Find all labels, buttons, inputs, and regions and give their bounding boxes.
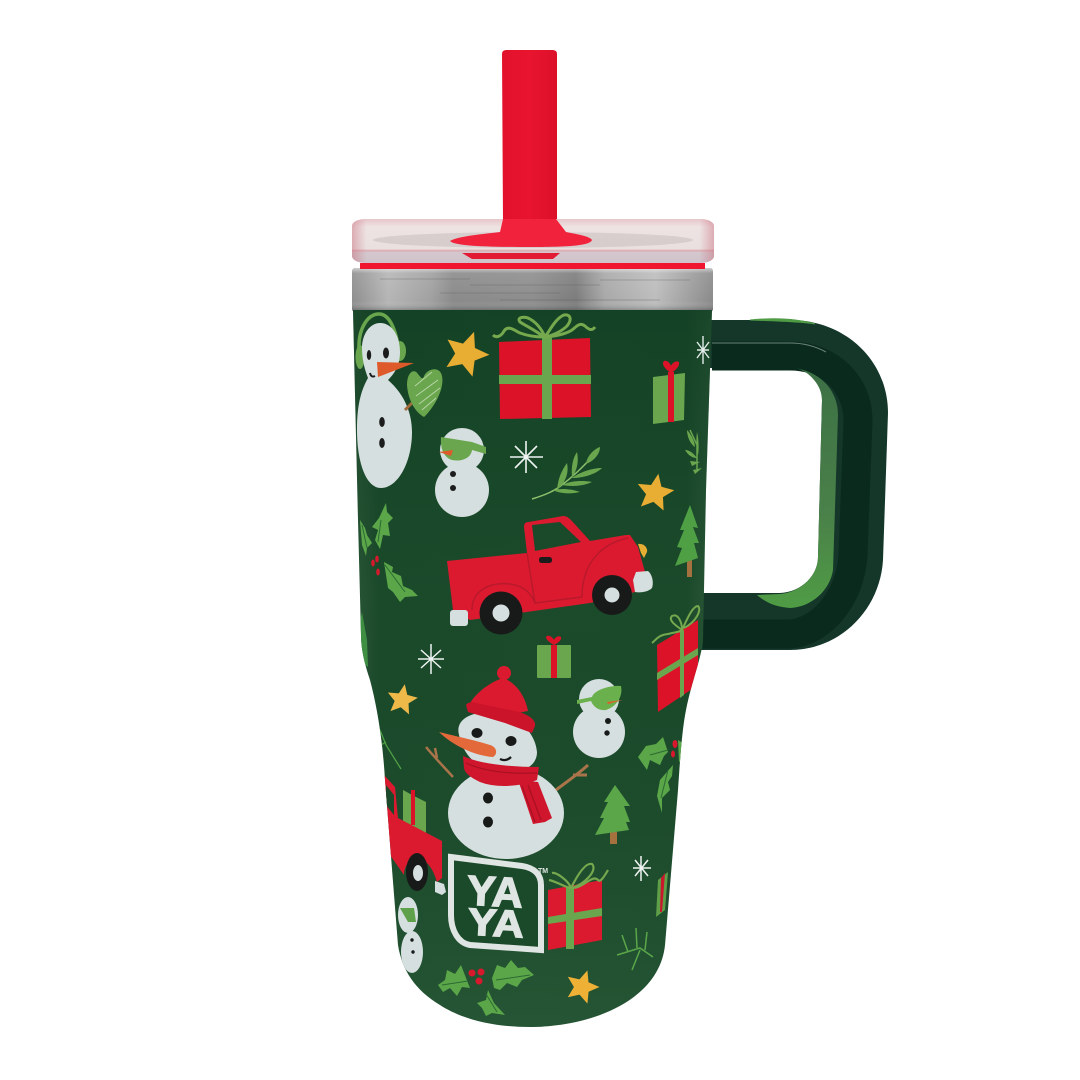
holly bottom	[438, 960, 534, 1016]
star	[638, 474, 674, 510]
YAYA logo	[451, 857, 548, 950]
sprig left	[380, 730, 401, 769]
sprig lower right	[617, 928, 653, 970]
tumbler body	[353, 310, 712, 1027]
snowman with red hat and scarf	[426, 666, 588, 859]
gift: right red	[652, 606, 699, 712]
snowman at lower left edge	[398, 897, 423, 973]
tumbler illustration	[352, 50, 888, 1027]
tree	[675, 505, 699, 577]
clear lid	[352, 219, 714, 263]
handle	[700, 319, 888, 650]
steel rim	[352, 268, 713, 312]
snowman with earmuffs	[356, 314, 442, 488]
sprig at right edge	[685, 430, 702, 474]
straw	[502, 50, 557, 222]
holly right	[638, 737, 686, 813]
snowman with green goggles	[435, 428, 489, 517]
star	[568, 970, 600, 1004]
truck with gift at left	[384, 775, 446, 895]
leafy sprig	[532, 447, 602, 499]
YAYA logo: YA	[467, 902, 525, 946]
red gasket	[360, 263, 705, 269]
star	[388, 684, 418, 714]
snowman with green goggles, lower	[573, 679, 625, 758]
YAYA logo: YA	[466, 867, 524, 916]
snowflake	[510, 441, 543, 473]
small gift right	[656, 872, 668, 917]
small green gift	[537, 636, 571, 678]
tree	[595, 785, 630, 844]
printed pattern	[356, 314, 709, 1016]
tree at left edge	[360, 612, 368, 667]
holly cluster	[360, 503, 418, 602]
red pickup truck	[447, 516, 653, 634]
sparkle	[697, 336, 709, 364]
YAYA logo: TM	[538, 868, 548, 875]
gift: lower red	[548, 864, 608, 950]
gift: small green	[653, 361, 685, 424]
snowflake	[633, 856, 651, 881]
gift: large red	[493, 315, 595, 419]
star	[446, 332, 490, 376]
snowflake	[418, 644, 444, 674]
